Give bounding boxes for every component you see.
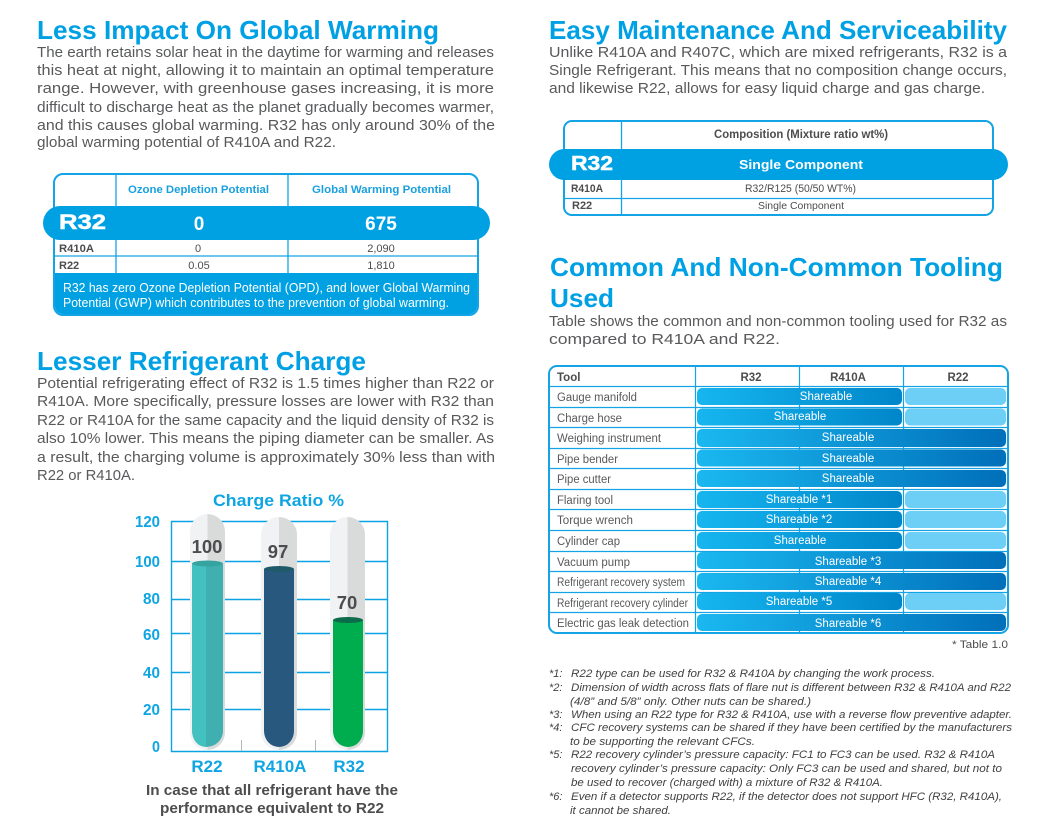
row: R22: R22 [572,200,592,212]
row: R410A: R32/R125 (50/50 WT%) [745,183,856,195]
row: R410A: R410A [59,243,94,255]
row: R410A: R410A [571,183,603,195]
row: R22 [572,200,844,212]
tube: R22 100: 100 [192,536,222,557]
text block: global warming intro: The earth retains solar heat in the daytime for warming and releases [37,44,494,61]
tool names: Refrigerant recovery cylinder [557,598,688,610]
shareable labels: Shareable *5 [766,596,832,608]
text block: refrigerant charge: R22 or R410A. [37,467,135,484]
shareable labels: Shareable *1 [766,494,832,506]
text block: refrigerant charge: a result, the charging volume is approximately 30% less than with [37,449,495,466]
tool names: Weighing instrument [557,433,662,445]
tool names: Pipe bender [557,454,618,466]
tool names: Electric gas leak detection [557,618,689,630]
table reference note: * Table 1.0 [952,639,1008,651]
footnotes: CFC recovery systems can be shared if they have been certified by the manufacturers [571,722,1013,734]
footnotes: *3: [549,709,562,721]
shareable labels: Shareable [822,473,874,485]
text block: global warming intro [37,44,495,151]
chart caption: performance equivalent to R22 [160,800,384,817]
heading: common and non-common tooling: Used [550,283,614,313]
footnotes: *5: [549,749,562,761]
tube: R32 70: 70 [337,592,357,613]
footnotes: When using an R22 type for R32 & R410A, use with a reverse flow preventive adapter. [571,709,1012,721]
chart: charge ratio [135,491,398,817]
tool names: Refrigerant recovery system [557,577,685,589]
text block: refrigerant charge: R22 or R410A for the same capacity and the liquid density of R32 is [37,412,494,429]
row: R32 [571,153,864,175]
note: zero ODP statement: Potential (GWP) which contributes to the prevention of global warming. [63,296,449,310]
row: R32: R32 [571,153,613,175]
y axis labels: 100 [135,554,160,571]
shareable labels: Shareable [822,453,874,465]
text block: maintenance: Unlike R410A and R407C, which are mixed refrigerants, R32 is a [549,44,1008,61]
row: R22: 1,810 [367,260,395,272]
row: R410A: 0 [195,243,201,255]
text block: global warming intro: global warming potential of R410A and R22. [37,134,336,151]
footnotes: be used to recover (charged with) a mixture of R32 & R410A. [571,777,883,789]
table header: Tool [557,372,580,384]
chart caption [146,782,398,817]
text block: tooling intro: Table shows the common and non-common tooling used for R32 as [549,313,1007,330]
shareable labels: Shareable [800,391,852,403]
tool names [557,392,689,630]
text block: global warming intro: and this causes global warming. R32 has only around 30% of the [37,117,495,134]
heading: common and non-common tooling: Common And Non-Common Tooling [550,252,1003,282]
shareable labels: Shareable *4 [815,576,882,588]
footnotes [549,668,1013,817]
y axis labels: 40 [143,665,160,682]
tube: R22 100 [190,514,225,750]
row: R32 [59,211,397,235]
footnotes: R22 recovery cylinder’s pressure capacity: FC1 to FC3 can be used. R32 & R410A [571,749,995,761]
category labels: R22 [191,757,223,776]
shareable labels: Shareable *3 [815,556,881,568]
panel: tooling table [549,366,1008,633]
text block: refrigerant charge: also 10% lower. This means the piping diameter can be smaller. As [37,430,494,447]
footnotes: recovery cylinder’s pressure capacity: Only FC3 can be used and shared, but not to [571,763,1002,775]
row: R22 [59,260,395,272]
category labels [191,757,365,776]
text block: maintenance: and likewise R22, allows for easy liquid charge and gas charge. [549,80,985,97]
column header: global warming potential: Global Warming Potential [312,184,451,196]
table header [557,372,969,384]
y axis labels: 120 [135,514,160,531]
tool names: Gauge manifold [557,392,637,404]
shareable labels [766,391,882,630]
text block: maintenance: Single Refrigerant. This means that no composition change occurs, [549,62,1007,79]
row: R410A: 2,090 [367,243,395,255]
chart axis and grid [171,522,388,752]
text block: refrigerant charge: R410A. More specifically, pressure losses are lower with R32 than [37,393,494,410]
shareable bars [697,388,1006,631]
tool names: Vacuum pump [557,557,630,569]
text block: refrigerant charge: Potential refrigerating effect of R32 is 1.5 times higher than R22 or [37,375,494,392]
tool names: Torque wrench [557,515,633,527]
shareable labels: Shareable *2 [766,514,832,526]
text block: maintenance [549,44,1008,97]
tool names: Pipe cutter [557,474,611,486]
row: R22: R22 [59,260,79,272]
text block: refrigerant charge [37,375,495,484]
note: zero ODP statement [63,281,470,310]
panel: composition table [549,121,1008,215]
tool names: Flaring tool [557,495,613,507]
footnotes: R22 type can be used for R32 & R410A by changing the work process. [571,668,935,680]
footnotes: to be supporting the relevant CFCs. [570,736,755,748]
row: R22: Single Component [758,200,844,212]
tube: R410A 97 [261,517,297,750]
tool names: Charge hose [557,413,622,425]
footnotes: *6: [549,791,562,803]
y axis labels: 0 [152,739,160,756]
text block: global warming intro: range. However, with greenhouse gases increasing, it is more [37,80,494,97]
tube: R32 70 [330,517,365,750]
shareable labels: Shareable [774,535,826,547]
table header: R32 [740,372,762,384]
heading: easy maintenance: Easy Maintenance And Serviceability [549,15,1008,45]
tool names: Cylinder cap [557,536,620,548]
column header: ozone depletion potential: Ozone Depletion Potential [128,184,269,196]
footnotes: *4: [549,722,562,734]
row: R32: Single Component [739,157,864,172]
y axis labels: 60 [143,627,160,644]
heading: lesser refrigerant charge: Lesser Refrigerant Charge [37,346,366,376]
shareable labels: Shareable *6 [815,618,881,630]
text block: tooling intro: compared to R410A and R22. [549,331,780,348]
shareable labels: Shareable [774,411,826,423]
chart title: Charge Ratio % [213,491,344,510]
footnotes: *1: [549,668,562,680]
y axis labels: 80 [143,591,160,608]
footnotes: Even if a detector supports R22, if the detector does not support HFC (R32, R410A), [571,791,1002,803]
y axis labels: 20 [143,702,160,719]
chart caption: In case that all refrigerant have the [146,782,398,799]
row: R32: 675 [365,214,397,235]
column header: composition: Composition (Mixture ratio wt%) [714,129,888,141]
panel: ozone and global warming potential table [43,174,490,315]
footnotes: (4/8” and 5/8” only. Other nuts can be shared.) [570,696,811,708]
text block: tooling intro [549,313,1007,348]
shareable labels: Shareable [822,432,874,444]
heading: common and non-common tooling [550,252,1003,313]
note: zero ODP statement: R32 has zero Ozone Depletion Potential (OPD), and lower Global Warming [63,281,470,295]
row: R32: R32 [59,211,106,234]
table header: R22 [947,372,969,384]
footnotes: Dimension of width across flats of flare nut is different between R32 & R410A and R22 [571,682,1011,694]
y axis labels [135,514,160,756]
row: R410A [59,243,395,255]
footnotes: *2: [549,682,562,694]
category labels: R410A [254,757,306,776]
row: R410A [571,183,856,195]
heading: less impact on global warming: Less Impact On Global Warming [37,15,439,45]
tube: R410A 97: 97 [268,541,288,562]
text block: global warming intro: difficult to discharge heat as the planet gradually becomes warmer, [37,99,494,116]
category labels: R32 [333,757,365,776]
footnotes: it cannot be shared. [570,805,671,817]
table header: R410A [830,372,866,384]
text block: global warming intro: this heat at night, allowing it to maintain an optimal temperature [37,62,494,79]
row: R22: 0.05 [188,260,210,272]
row: R32: 0 [194,214,204,235]
